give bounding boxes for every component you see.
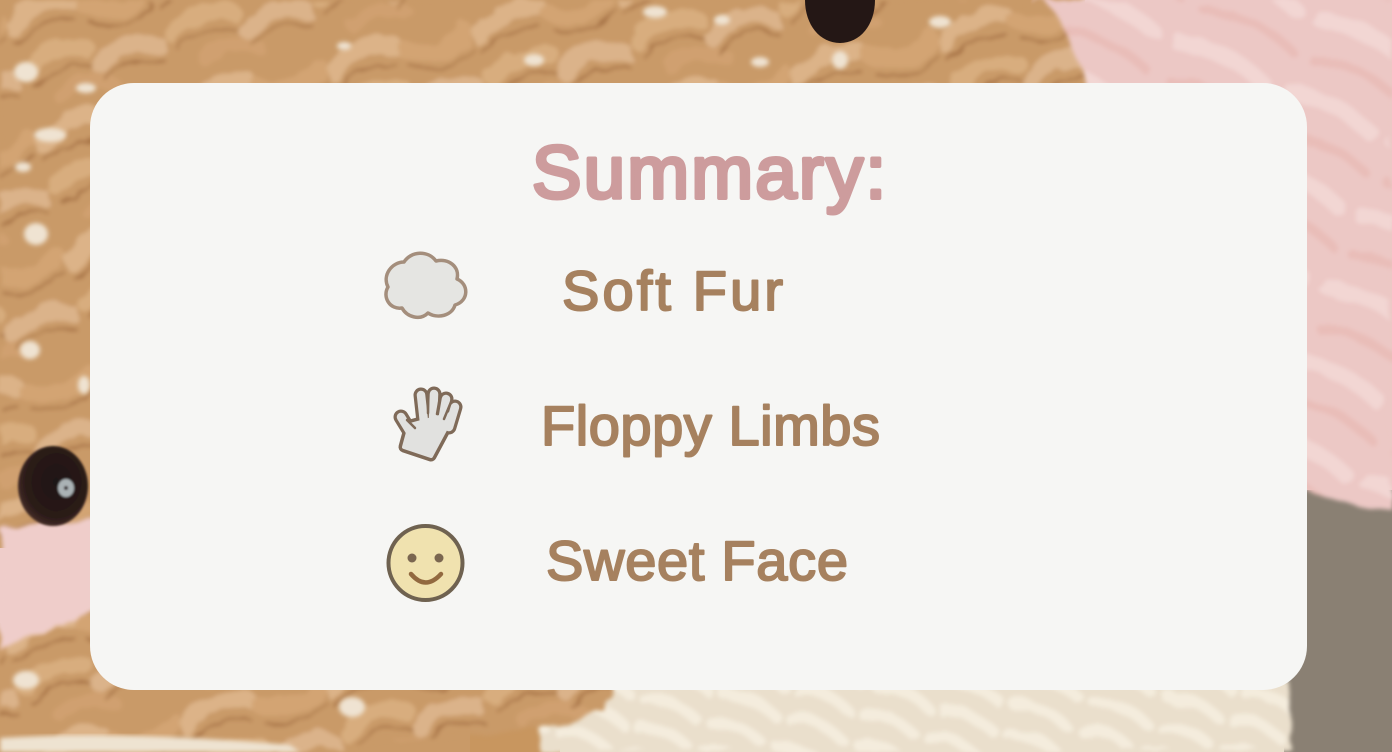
cream strip at bottom left [0,735,300,752]
pink ear base [1085,0,1392,490]
label: Soft Fur [562,259,783,322]
label: Floppy Limbs [541,394,880,457]
item: floppy limbs [401,394,880,457]
icon: cloud [386,253,466,317]
left eye [18,446,88,526]
heading: Summary: [532,131,886,214]
pink cheek base [0,548,30,623]
pink ear fur [1030,0,1392,510]
cream belly fur [540,680,1294,752]
icon: hand [401,394,455,456]
hand fill [401,394,455,456]
brown fur [0,0,1090,752]
item: sweet face [388,526,848,600]
item: soft fur [386,253,783,322]
cream belly base [560,700,1284,752]
brown fur base [0,0,1030,752]
finger lines [407,396,451,428]
hand outline [401,394,455,456]
icon: smiley face [388,526,462,600]
pink cheek [0,520,100,650]
card background [90,83,1307,690]
panel: summary card [90,83,1307,690]
top eye [805,0,875,43]
white fur spots [13,6,951,717]
label: Sweet Face [546,529,848,592]
background wall [1200,0,1392,752]
